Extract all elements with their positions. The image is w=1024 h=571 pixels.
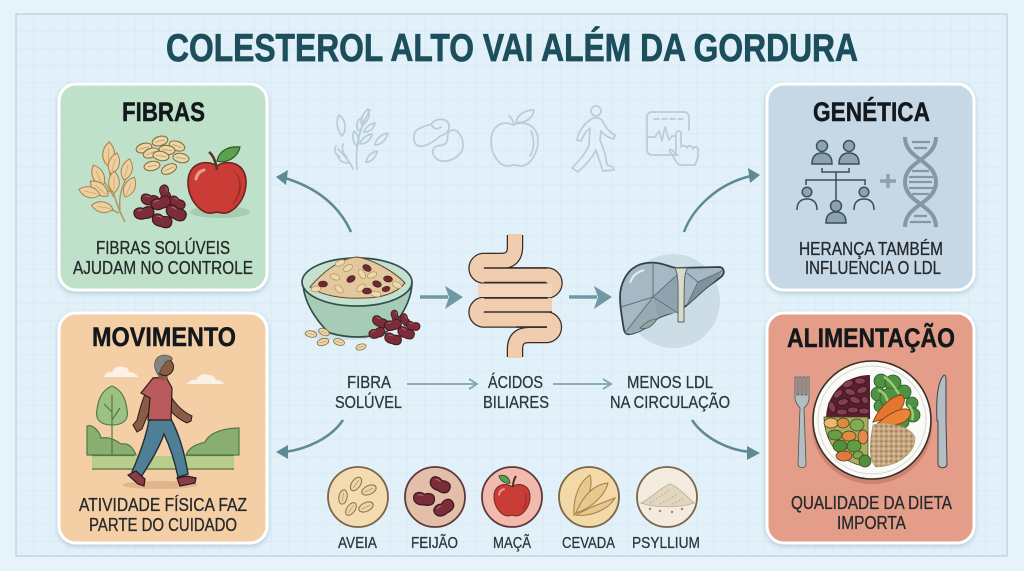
- panel: fibras: [59, 84, 267, 290]
- caption: alimentação: IMPORTA: [837, 512, 907, 533]
- label: ácidos biliares: ÁCIDOS: [488, 372, 543, 392]
- caption: fibras: AJUDAM NO CONTROLE: [73, 257, 253, 278]
- arrowhead: to genética: [748, 168, 760, 183]
- arrowhead: to movimento: [276, 445, 288, 459]
- label: fibra solúvel: [335, 372, 402, 412]
- arrow: centre to fibras: [285, 178, 351, 232]
- illustration: intestine: [477, 234, 554, 358]
- food source: psyllium: [632, 467, 700, 552]
- icon: plus: [880, 174, 896, 188]
- panel: alimentação: [767, 313, 974, 543]
- icon: wheat: [78, 142, 139, 222]
- caption: genética: HERANÇA TAMBÉM: [799, 238, 943, 259]
- illustration: park scenery: [87, 367, 239, 489]
- arrow: intestine to liver: [569, 286, 612, 309]
- caption: genética: [799, 238, 943, 278]
- arrow: centre to alimentação: [692, 420, 750, 452]
- caption: fibras: FIBRAS SOLÚVEIS: [96, 237, 230, 258]
- caption: alimentação: [791, 492, 953, 533]
- caption: movimento: [79, 494, 247, 535]
- title: COLESTEROL ALTO VAI ALÉM DA GORDURA: [166, 26, 858, 70]
- panel: genética: [767, 84, 974, 290]
- caption: movimento: ATIVIDADE FÍSICA FAZ: [79, 494, 247, 515]
- faded icon: beans: [414, 119, 463, 161]
- arrowhead: to alimentação: [747, 446, 760, 460]
- icon: kidney beans: [133, 184, 188, 229]
- heading: genética: GENÉTICA: [813, 96, 930, 127]
- icon: apple with leaf: [188, 147, 250, 218]
- food: beans: [826, 375, 870, 419]
- arrow: centre to genética: [684, 176, 751, 232]
- food source: aveia: AVEIA: [338, 535, 378, 552]
- heading: movimento: MOVIMENTO: [92, 322, 236, 352]
- food source: feijão: [405, 467, 465, 552]
- food: grains: [870, 423, 915, 467]
- food source: cevada: CEVADA: [562, 535, 616, 552]
- caption: alimentação: QUALIDADE DA DIETA: [791, 492, 953, 513]
- food source: aveia: [328, 467, 388, 552]
- label: ácidos biliares: BILIARES: [483, 392, 549, 412]
- icon: plate of food: [812, 361, 932, 484]
- icon: family tree: [797, 140, 874, 223]
- food source: maçã: MAÇÃ: [493, 535, 532, 552]
- label: fibra solúvel: SOLÚVEL: [335, 391, 402, 412]
- label: fibra solúvel: FIBRA: [347, 372, 391, 392]
- heading: fibras: FIBRAS: [122, 97, 205, 127]
- illustration: oatmeal bowl: [302, 257, 421, 351]
- faded icon: walker: [572, 106, 615, 172]
- label: menos ldl na circulação: MENOS LDL: [627, 372, 713, 392]
- food source: psyllium: PSYLLIUM: [632, 535, 700, 552]
- faded icon: apple: [491, 110, 538, 166]
- faded icon row: [335, 106, 698, 172]
- arrow: ácidos to menos ldl: [553, 379, 611, 389]
- icon: dna helix: [905, 137, 936, 227]
- label: menos ldl na circulação: [610, 372, 730, 412]
- arrowhead: to fibras: [276, 170, 288, 185]
- caption: genética: INFLUENCIA O LDL: [805, 257, 941, 278]
- faded icon: leaves and grain: [335, 109, 388, 169]
- label: ácidos biliares: [483, 372, 549, 412]
- caption: fibras: [73, 237, 253, 278]
- illustration: walking man: [128, 355, 196, 486]
- faded icon: tablet touch: [647, 112, 698, 165]
- arrow: bowl to intestine: [420, 286, 463, 309]
- arrow: centre to movimento: [285, 420, 343, 452]
- label: menos ldl na circulação: NA CIRCULAÇÃO: [610, 391, 730, 412]
- food source: cevada: [559, 467, 619, 552]
- food source: feijão: FEIJÃO: [411, 535, 458, 552]
- food source: maçã: [482, 467, 542, 552]
- food: greens and carrots: [871, 374, 920, 428]
- illustration: liver: [620, 254, 724, 348]
- arrow: fibra to ácidos: [407, 379, 477, 389]
- icon: fork: [795, 377, 809, 468]
- icon: oats: [135, 134, 190, 177]
- food: mixed vegetables: [824, 417, 871, 467]
- caption: movimento: PARTE DO CUIDADO: [89, 514, 237, 535]
- icon: knife: [937, 375, 947, 468]
- panel: movimento: [59, 313, 267, 543]
- heading: alimentação: ALIMENTAÇÃO: [787, 322, 955, 353]
